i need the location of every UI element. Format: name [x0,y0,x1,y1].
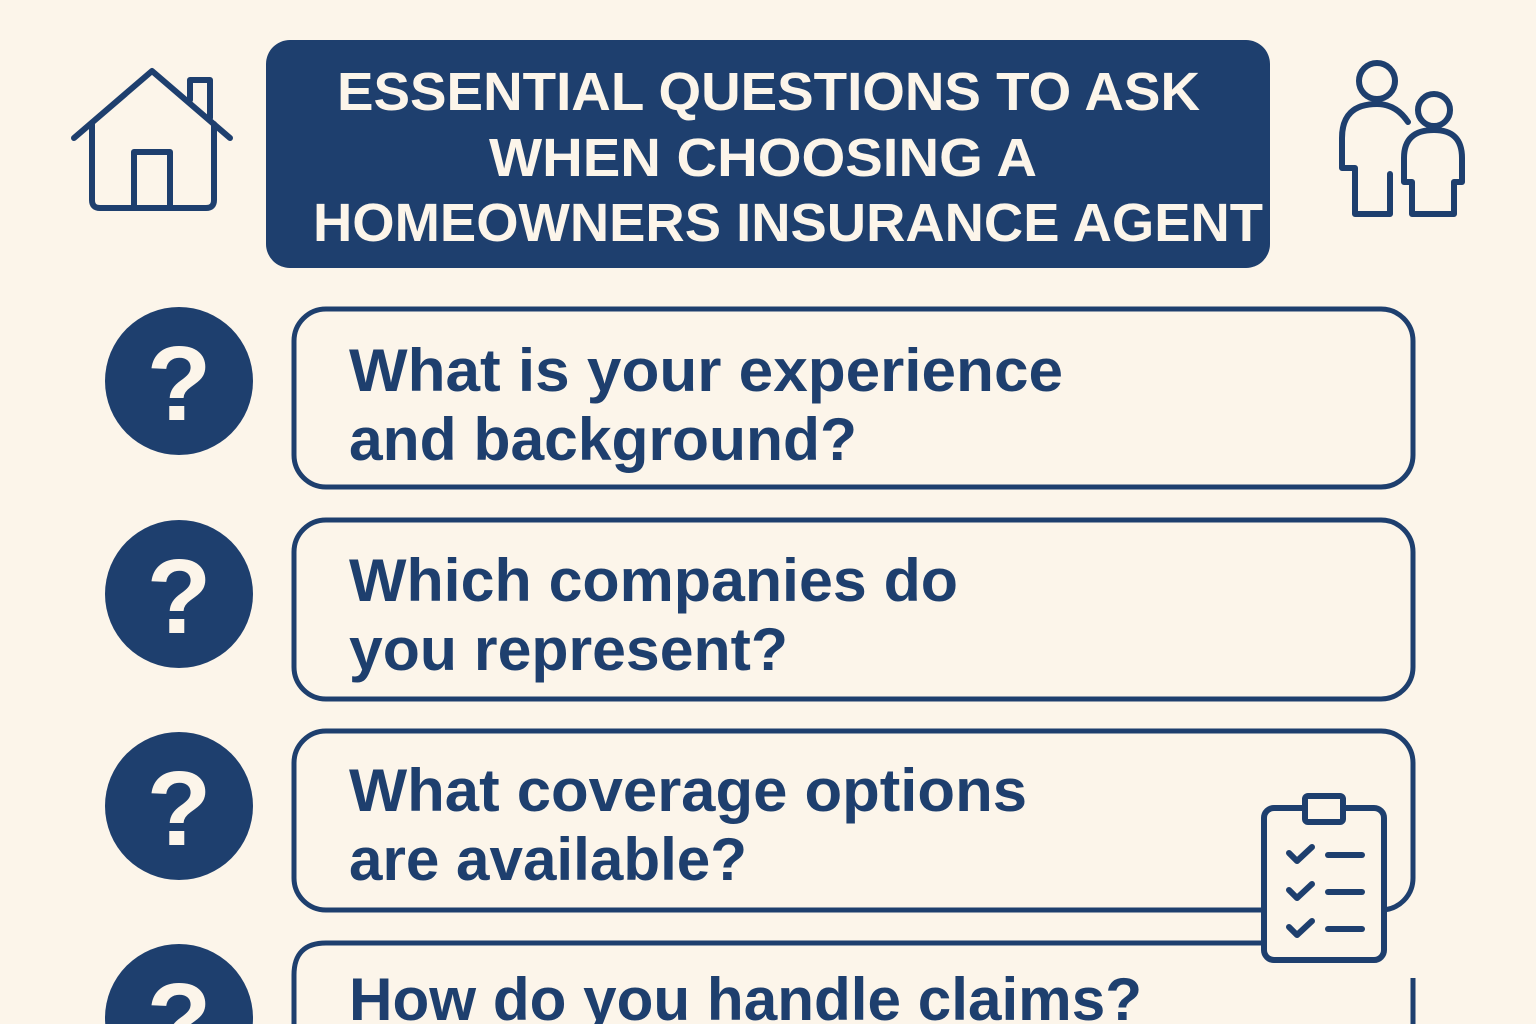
question 1: ? [147,325,211,443]
question 2 [105,520,1413,699]
question 1: and background? [349,406,857,473]
title [266,40,1270,268]
title: WHEN CHOOSING A [489,128,1037,188]
question 3: ? [147,750,211,868]
question 3: What coverage options [349,757,1027,824]
question 2: you represent? [349,616,788,683]
icon: house [74,71,230,208]
question 2: ? [147,538,211,656]
question 1: What is your experience [349,337,1063,404]
question 1 [105,307,1413,487]
question 3 [105,731,1413,910]
question 2: Which companies do [349,547,958,614]
question 4 [105,943,1413,1024]
icon: people [1342,63,1462,214]
question 3: are available? [349,826,747,893]
title: ESSENTIAL QUESTIONS TO ASK [337,62,1200,122]
title: HOMEOWNERS INSURANCE AGENT [313,193,1263,253]
icon: clipboard [1264,796,1384,960]
